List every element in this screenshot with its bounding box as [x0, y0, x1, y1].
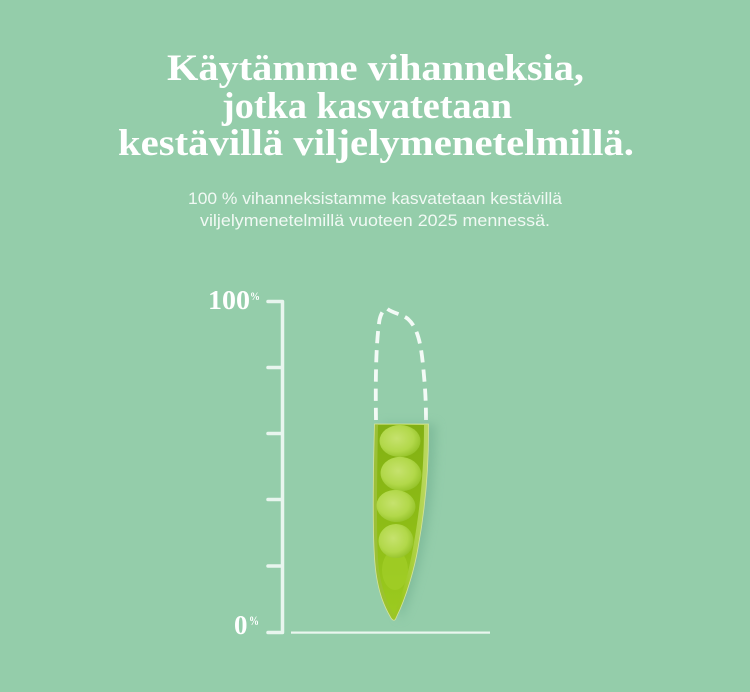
pea 1 [380, 425, 420, 457]
label: 100%: % [250, 289, 260, 303]
pea 2 [378, 454, 424, 494]
label: 0%: 0 [234, 610, 248, 640]
baseline [291, 632, 490, 634]
title: Käytämme vihanneksia, [167, 48, 584, 89]
subtitle text: 100 % vihanneksistamme kasvatetaan kestävillä [188, 190, 563, 208]
scale axis with ticks [268, 302, 282, 632]
pod shell [373, 424, 429, 620]
subtitle text [188, 190, 563, 230]
label: 0%: % [249, 613, 259, 628]
title: kestävillä viljelymenetelmillä. [118, 123, 634, 164]
pod inner [377, 425, 424, 614]
dashed outline: remaining pea pod [376, 308, 426, 420]
pod shadow [382, 424, 436, 620]
label: 100%: 100 [208, 285, 250, 315]
subtitle text: viljelymenetelmillä vuoteen 2025 mennessä. [200, 212, 550, 230]
label: 0% [234, 610, 259, 640]
title: jotka kasvatetaan [221, 86, 512, 127]
pea 3 [375, 488, 417, 524]
pea 4 [378, 524, 414, 558]
pea pod illustration [373, 424, 436, 620]
pod lower highlight [382, 550, 408, 590]
title [118, 48, 634, 164]
